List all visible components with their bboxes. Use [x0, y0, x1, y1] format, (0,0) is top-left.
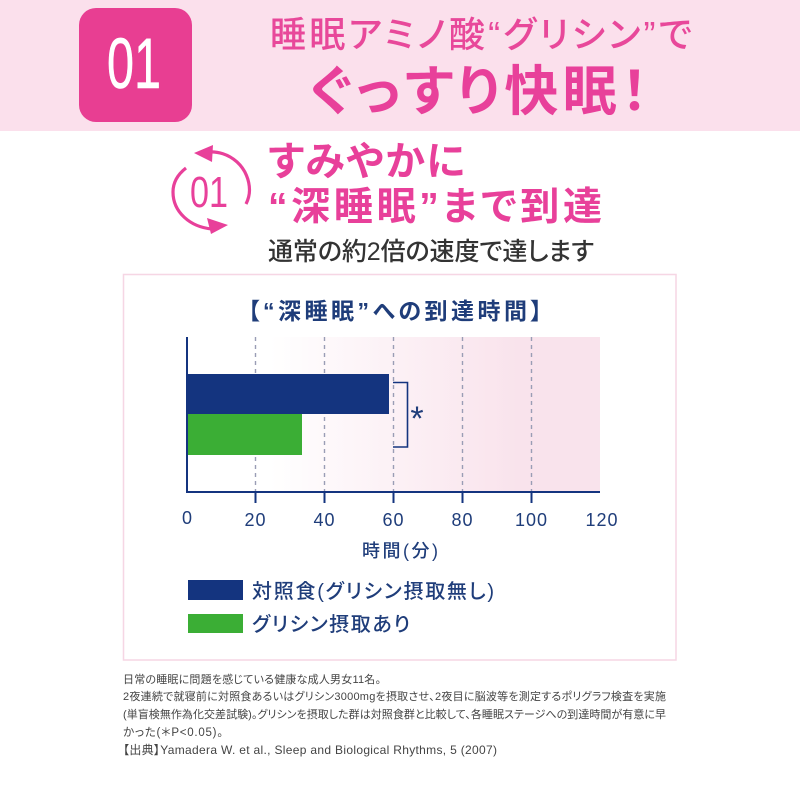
bar chart	[182, 337, 619, 561]
section heading: すみやかに	[268, 140, 465, 184]
axes	[186, 337, 600, 503]
subheading: 通常の約2倍の速度で達します	[268, 238, 594, 266]
legend: グリシン摂取あり	[252, 613, 410, 636]
icon: cycle arrows with 01: 01	[190, 168, 228, 217]
significance bracket: *	[410, 400, 424, 438]
footnote	[123, 672, 666, 757]
significance bracket	[393, 382, 424, 447]
x axis labels: 0	[182, 508, 192, 528]
section heading	[268, 140, 602, 229]
header band	[0, 0, 800, 131]
title line 1: 睡眠アミノ酸“グリシン”で	[270, 14, 692, 55]
x axis labels: 80	[451, 510, 474, 530]
title line 2: ぐっすり快眠！	[308, 62, 648, 122]
x axis labels	[182, 508, 619, 530]
number badge: 01	[107, 25, 161, 104]
x axis labels: 100	[515, 510, 548, 530]
x axis labels: 20	[244, 510, 267, 530]
bar: control diet	[187, 374, 389, 414]
footnote: (単盲検無作為化交差試験)。グリシンを摂取した群は対照食群と比較して、各睡眠ステージへの到達時間が有意に早	[123, 707, 666, 721]
x axis title: 時間(分)	[362, 541, 438, 561]
chart title: 【“深睡眠”への到達時間】	[248, 298, 542, 324]
icon: cycle arrows with 01	[173, 145, 250, 234]
footnote: 2夜連続で就寝前に対照食あるいはグリシン3000mgを摂取させ、2夜目に脳波等を測定するポリグラフ検査を実施	[123, 689, 666, 703]
number badge	[79, 8, 192, 122]
footnote: かった(＊P<0.05)。	[123, 726, 223, 739]
legend: 対照食(グリシン摂取無し)	[252, 580, 494, 603]
section heading: “深睡眠”まで到達	[268, 186, 602, 229]
bar: glycine	[187, 414, 302, 455]
panel: chart	[124, 274, 676, 660]
legend	[188, 580, 494, 636]
x axis labels: 40	[313, 510, 336, 530]
x axis labels: 60	[382, 510, 405, 530]
x axis labels: 120	[585, 510, 619, 530]
footnote: 日常の睡眠に問題を感じている健康な成人男女11名。	[123, 672, 381, 686]
footnote: 【出典】Yamadera W. et al., Sleep and Biological Rhythms, 5 (2007)	[123, 743, 497, 757]
